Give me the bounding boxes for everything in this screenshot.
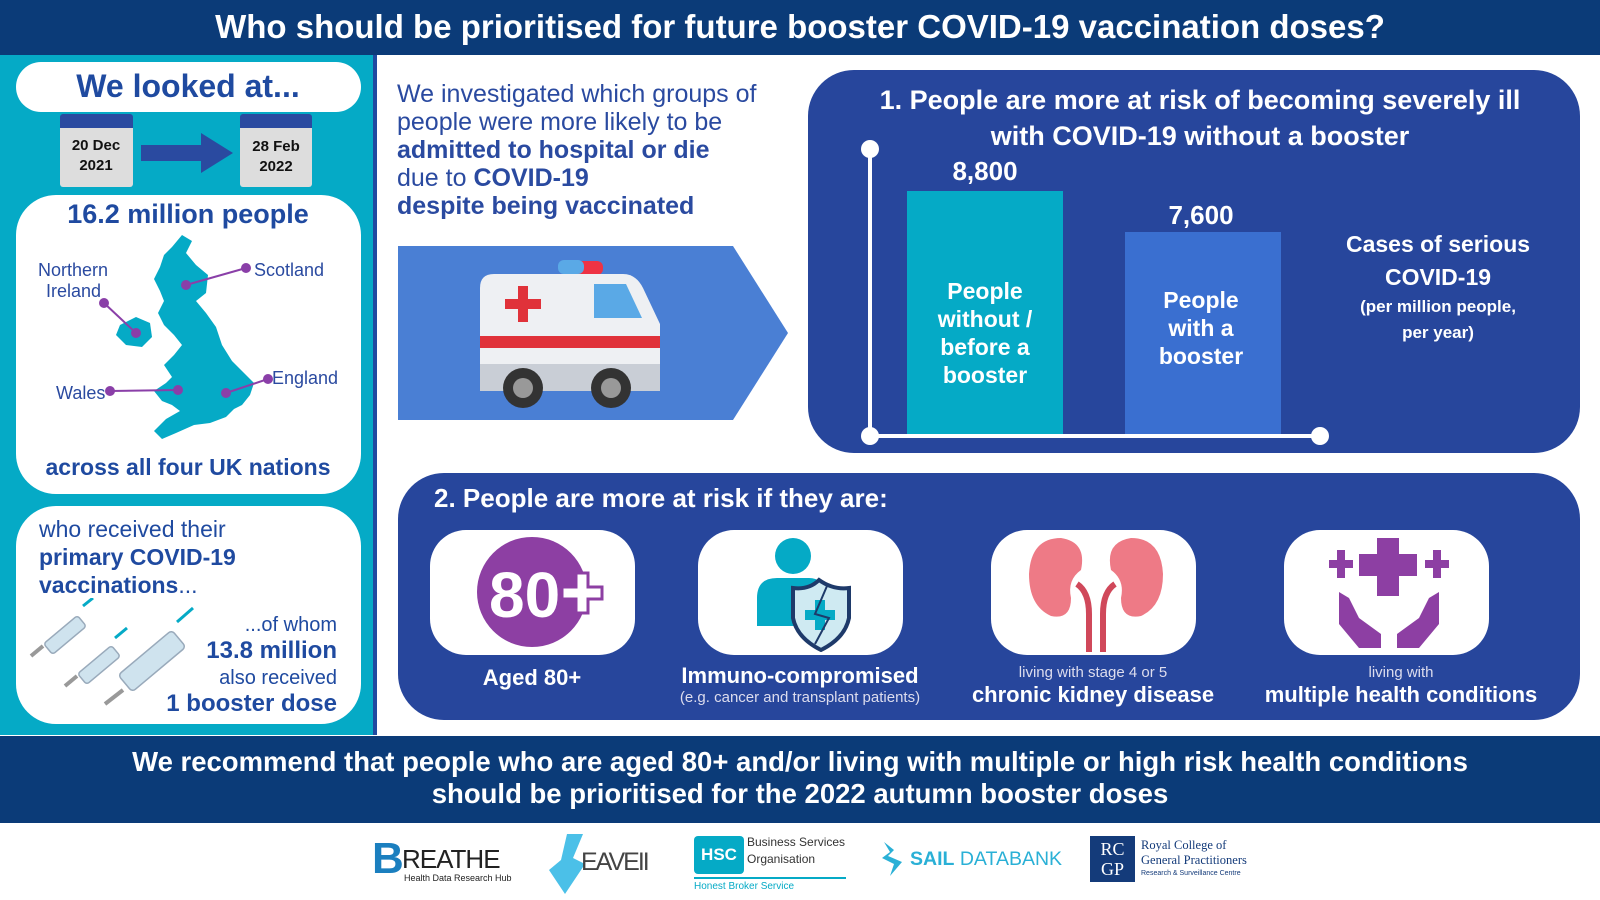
panel 1 title bbox=[880, 85, 1520, 151]
panel 1: risk chart: (per million people, bbox=[1360, 297, 1516, 316]
vaccination panel: 1 booster dose bbox=[166, 690, 337, 717]
panel 2: risk groups: chronic kidney disease bbox=[972, 682, 1214, 707]
panel 2: risk groups: multiple health conditions bbox=[1265, 682, 1537, 707]
intro text: despite being vaccinated bbox=[397, 192, 694, 220]
icon: syringes bbox=[30, 598, 194, 706]
vaccination panel: primary COVID-19 bbox=[39, 544, 236, 570]
map of UK: Ireland bbox=[46, 281, 101, 301]
title: Who should be prioritised for future booster COVID-19 vaccination doses? bbox=[215, 8, 1385, 45]
calendar: end bbox=[240, 114, 312, 187]
divider bbox=[373, 55, 377, 735]
map of UK: England bbox=[272, 368, 338, 388]
chart legend: Cases of serious bbox=[1346, 231, 1530, 257]
calendar: start: 20 Dec bbox=[72, 137, 120, 154]
vaccination panel: vaccinations... bbox=[39, 572, 198, 598]
calendar: end: 2022 bbox=[259, 158, 293, 175]
calendar: start: 2021 bbox=[79, 157, 113, 174]
panel 2: risk groups: living with bbox=[1368, 664, 1434, 681]
intro text: people were more likely to be bbox=[397, 108, 722, 136]
left panel bbox=[0, 55, 373, 735]
bar chart: People bbox=[947, 278, 1023, 304]
logo: eave II: EAVEII bbox=[581, 848, 648, 876]
vaccination panel: ...of whom bbox=[245, 614, 337, 636]
panel 2: risk groups: (e.g. cancer and transplant patients) bbox=[680, 689, 920, 706]
logo: RCGP: Royal College of bbox=[1141, 838, 1226, 852]
logo: SAIL: SAIL DATABANK bbox=[910, 848, 1062, 870]
bar chart: booster bbox=[943, 362, 1027, 388]
card: aged 80+ bbox=[430, 530, 635, 655]
logo: RCGP bbox=[1090, 836, 1247, 882]
intro text: We investigated which groups of bbox=[397, 80, 756, 108]
vaccination panel bbox=[16, 506, 361, 724]
logo: breathe bbox=[372, 834, 512, 883]
logo: HSC: Organisation bbox=[747, 852, 815, 866]
intro text bbox=[397, 80, 756, 220]
chart legend: COVID-19 bbox=[1385, 264, 1491, 290]
recommendation band bbox=[0, 736, 1600, 823]
logos bbox=[372, 834, 1247, 894]
logo: RCGP: General Practitioners bbox=[1141, 853, 1247, 867]
ambulance banner bbox=[398, 246, 788, 420]
bar chart: without / bbox=[938, 306, 1032, 332]
bar: with booster bbox=[1125, 232, 1281, 434]
panel 2: risk groups: living with stage 4 or 5 bbox=[1019, 664, 1167, 681]
header bar bbox=[0, 0, 1600, 55]
panel 2: risk groups: 2. People are more at risk if they are: bbox=[434, 483, 888, 513]
intro text: admitted to hospital or die bbox=[397, 136, 710, 164]
bar chart: before a bbox=[940, 334, 1030, 360]
bar chart: 7,600 bbox=[1168, 200, 1234, 230]
logo: breathe: REATHE bbox=[402, 844, 500, 874]
logo: SAIL bbox=[882, 842, 1062, 876]
map of UK bbox=[38, 235, 338, 439]
logo: RCGP: GP bbox=[1101, 859, 1124, 879]
card: kidney disease bbox=[991, 530, 1196, 655]
calendar: start bbox=[60, 114, 133, 187]
panel 1: risk chart: per year) bbox=[1402, 323, 1474, 342]
bar chart: with a bbox=[1168, 315, 1234, 341]
logo: HSC: HSC bbox=[701, 845, 737, 864]
arrow bbox=[141, 133, 233, 173]
map of UK: Northern bbox=[38, 260, 108, 280]
bar chart: booster bbox=[1159, 343, 1243, 369]
recommendation band: We recommend that people who are aged 80+ and/or living with multiple or high risk health conditions bbox=[132, 746, 1468, 777]
panel 2: risk groups: Immuno-compromised bbox=[681, 663, 919, 688]
panel 2: risk groups bbox=[398, 473, 1580, 720]
bar chart: 8,800 bbox=[952, 156, 1018, 186]
map panel bbox=[16, 195, 361, 494]
card: immunocompromised bbox=[698, 530, 903, 655]
chart legend bbox=[1346, 231, 1530, 290]
pill: we looked at: We looked at... bbox=[76, 68, 300, 104]
logo: breathe: Health Data Research Hub bbox=[404, 873, 512, 883]
pill: we looked at bbox=[16, 62, 361, 112]
panel 2: risk groups: Aged 80+ bbox=[483, 665, 581, 690]
bar chart: People bbox=[1163, 287, 1239, 313]
panel 1 title: 1. People are more at risk of becoming severely ill bbox=[880, 85, 1520, 115]
recommendation band: should be prioritised for the 2022 autumn booster doses bbox=[432, 778, 1168, 809]
logo: breathe: B bbox=[372, 834, 404, 883]
logo: RCGP: Research & Surveillance Centre bbox=[1141, 870, 1241, 877]
logo: HSC: Business Services bbox=[747, 835, 845, 849]
logo: eave II bbox=[549, 834, 648, 894]
map of UK: Scotland bbox=[254, 260, 324, 280]
logo: HSC: Honest Broker Service bbox=[694, 881, 794, 892]
map of UK: Wales bbox=[56, 383, 105, 403]
logo: RCGP: RC bbox=[1100, 839, 1124, 859]
vaccination panel: who received their bbox=[39, 516, 226, 542]
card: aged 80+: 80 bbox=[489, 559, 560, 631]
bar chart bbox=[861, 140, 1329, 445]
calendar: end: 28 Feb bbox=[252, 138, 300, 155]
logo: HSC bbox=[694, 835, 846, 892]
map panel: 16.2 million people bbox=[67, 199, 309, 229]
bar: without booster bbox=[907, 191, 1063, 434]
vaccination panel: also received bbox=[219, 667, 337, 689]
vaccination panel: 13.8 million bbox=[206, 637, 337, 664]
panel 1: risk chart bbox=[808, 70, 1580, 453]
intro text: due to COVID-19 bbox=[397, 164, 589, 192]
card: multiple conditions bbox=[1284, 530, 1489, 655]
panel 1 title: with COVID-19 without a booster bbox=[991, 121, 1409, 151]
map panel: across all four UK nations bbox=[45, 454, 331, 480]
icon: ambulance bbox=[480, 260, 660, 408]
